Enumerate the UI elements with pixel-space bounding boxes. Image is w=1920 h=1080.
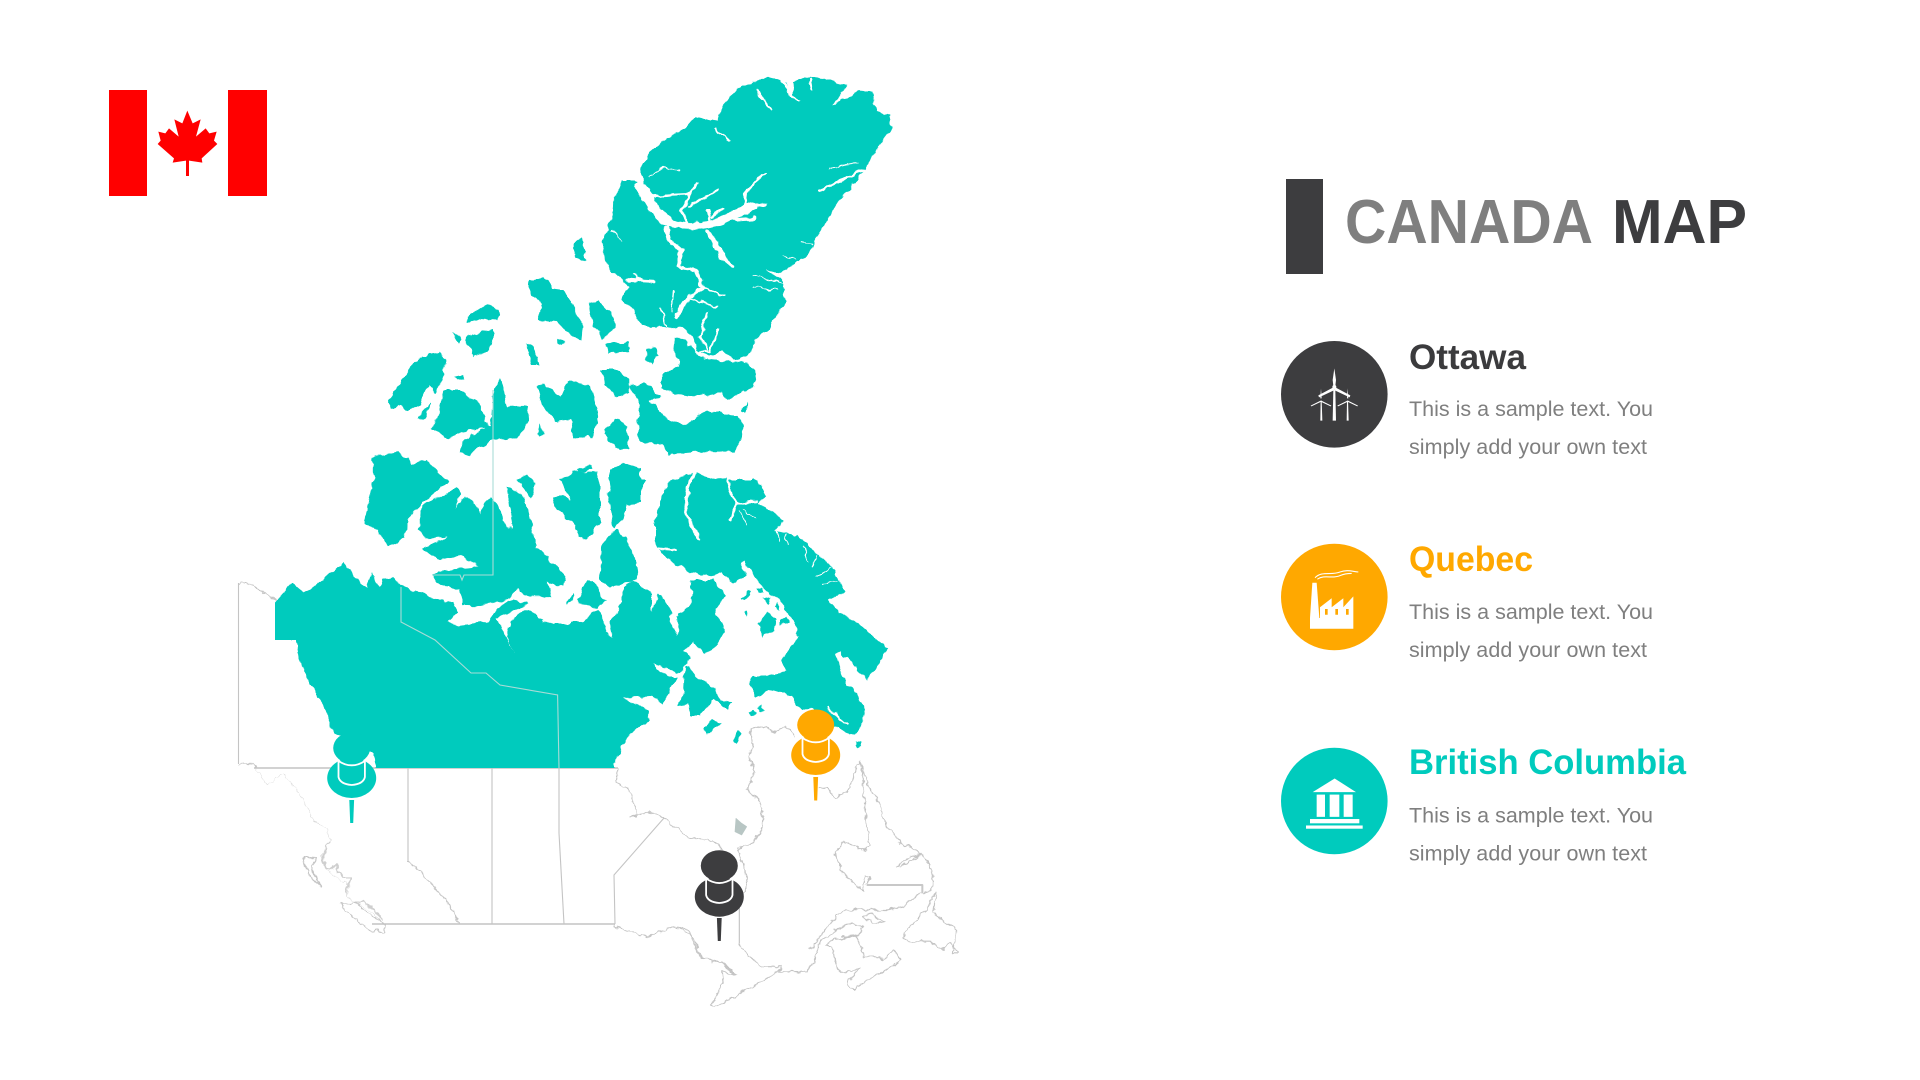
pin: British Columbia (teal) <box>327 732 376 823</box>
description: This is a sample text. You <box>1409 804 1653 828</box>
heading: British Columbia <box>1409 743 1687 782</box>
straight land edges on the 60th parallel and Yukon side <box>275 606 613 768</box>
description: This is a sample text. You <box>1409 397 1653 421</box>
provinces outline: southern territories <box>238 583 958 1007</box>
Canadian land in teal: Arctic islands and northern mainland <box>275 76 892 775</box>
territory borders on land <box>401 390 559 768</box>
pin: Quebec (orange) <box>791 710 840 800</box>
title <box>1345 188 1747 257</box>
description: simply add your own text <box>1409 435 1647 459</box>
title: CANADA <box>1345 188 1593 257</box>
description <box>1409 804 1653 866</box>
description <box>1409 600 1653 662</box>
pin: Ottawa (dark) <box>695 850 744 941</box>
heading: Quebec <box>1409 540 1533 579</box>
item: British Columbia <box>1281 743 1687 866</box>
icon: government building <box>1281 748 1388 854</box>
heading: Ottawa <box>1409 338 1527 377</box>
description: simply add your own text <box>1409 842 1647 866</box>
description: simply add your own text <box>1409 638 1647 662</box>
description <box>1409 397 1653 459</box>
icon: wind turbines <box>1281 341 1388 448</box>
item: Quebec <box>1281 540 1653 662</box>
title accent bar <box>1286 179 1323 274</box>
description: This is a sample text. You <box>1409 600 1653 624</box>
item: Ottawa <box>1281 338 1653 459</box>
title: MAP <box>1612 188 1747 257</box>
icon: Canadian flag <box>109 90 267 196</box>
map of Canada <box>238 76 958 1007</box>
icon: factory <box>1281 544 1388 650</box>
